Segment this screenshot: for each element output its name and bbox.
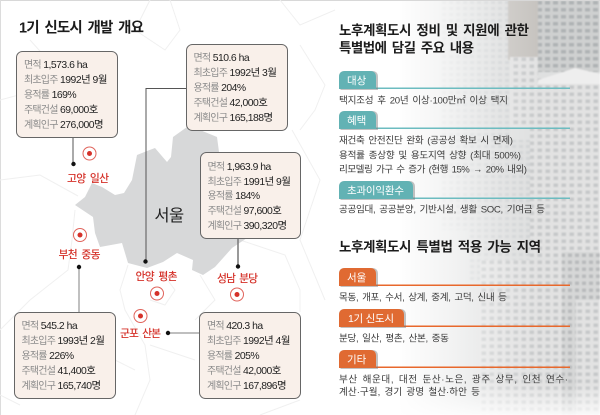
- heading: eligible areas: 노후계획도시 특별법 적용 가능 지역: [339, 240, 541, 254]
- panel: Bucheon Jungdong: 면적 545.2 ha: [22, 320, 78, 332]
- panel: Seongnam Bundang: [200, 152, 300, 238]
- panel: Goyang Ilsan: 계획인구 276,000명: [24, 119, 103, 131]
- panel: Bucheon Jungdong: 주택건설 41,400호: [22, 365, 96, 377]
- title: 1기 신도시 개발 개요: [19, 20, 144, 36]
- section: Seoul: 서울: [347, 272, 367, 284]
- panel: Goyang Ilsan: 최초입주 1992년 9월: [24, 73, 107, 86]
- marker: Anyang Pyeongchon: [150, 287, 164, 300]
- panel: Bucheon Jungdong: 최초입주 1993년 2월: [22, 334, 104, 347]
- panel: Goyang Ilsan: [16, 52, 118, 138]
- panel: Seongnam Bundang: 주택건설 97,600호: [208, 205, 282, 217]
- connector: Gunpo Sanbon: [166, 331, 200, 335]
- label: Goyang Ilsan: 고양 일산: [67, 171, 109, 185]
- marker: Seongnam Bundang: [230, 288, 244, 301]
- section: others: [339, 350, 570, 398]
- panel: Anyang Pyeongchon: 최초입주 1992년 3월: [194, 66, 276, 79]
- panel: Goyang Ilsan: 용적률 169%: [24, 89, 76, 101]
- panel: Gunpo Sanbon: 면적 420.3 ha: [207, 320, 263, 332]
- label: Seongnam Bundang: 성남 분당: [217, 272, 258, 285]
- section: target: [339, 71, 570, 106]
- panel: Gunpo Sanbon: 용적률 205%: [207, 350, 259, 362]
- section: benefits: 용적률 종상향 및 용도지역 상향 (최대 500%): [339, 150, 521, 162]
- panel: Goyang Ilsan: 주택건설 69,000호: [24, 104, 99, 116]
- panel: Seongnam Bundang: 면적 1,963.9 ha: [208, 161, 272, 173]
- section: benefits: [339, 111, 570, 176]
- connector: Seongnam Bundang: [236, 238, 240, 269]
- section: others: 기타: [347, 354, 367, 366]
- panel: Seongnam Bundang: 용적률 184%: [208, 190, 260, 202]
- panel: Gunpo Sanbon: [200, 312, 300, 398]
- panel: Anyang Pyeongchon: 계획인구 165,188명: [194, 112, 273, 124]
- section: excess profit recovery: 초과이익환수: [347, 185, 404, 197]
- label: Bucheon Jungdong: 부천 중동: [58, 247, 101, 261]
- label: Gunpo Sanbon: 군포 산본: [120, 327, 161, 340]
- section: target: 택지조성 후 20년 이상·100만㎡ 이상 택지: [339, 96, 508, 106]
- section: others: 계산·구월, 경기 광명 철산·하안 등: [339, 386, 480, 398]
- panel: Goyang Ilsan: 면적 1,573.6 ha: [24, 59, 88, 71]
- panel: Seongnam Bundang: 계획인구 390,320명: [208, 220, 287, 232]
- panel: Gunpo Sanbon: 계획인구 167,896명: [207, 380, 286, 392]
- section: target: 대상: [347, 75, 367, 87]
- map: Seoul: [75, 127, 260, 275]
- map: faint region boundaries: [0, 0, 335, 415]
- panel: Gunpo Sanbon: 주택건설 42,000호: [207, 365, 282, 377]
- marker: Gunpo Sanbon: [134, 310, 147, 322]
- panel: Anyang Pyeongchon: 주택건설 42,000호: [194, 97, 268, 109]
- connector: Anyang Pyeongchon: [143, 88, 187, 264]
- panel: Anyang Pyeongchon: [186, 44, 288, 130]
- panel: Bucheon Jungdong: [14, 312, 116, 398]
- heading: special act contents: [339, 23, 530, 56]
- section: first-generation new towns: [339, 309, 570, 344]
- section: benefits: 혜택: [347, 115, 366, 127]
- connector: Goyang Ilsan: [71, 137, 76, 166]
- section: Seoul: 목동, 개포, 수서, 상계, 중계, 고덕, 신내 등: [339, 292, 507, 304]
- heading: special act contents: 노후계획도시 정비 및 지원에 관한: [339, 23, 530, 38]
- section: first-generation new towns: 분당, 일산, 평촌, 산본, 중동: [339, 334, 449, 344]
- marker: Goyang Ilsan: [83, 147, 96, 160]
- panel: Bucheon Jungdong: 계획인구 165,740명: [22, 380, 101, 392]
- connector: Bucheon Jungdong: [77, 265, 81, 312]
- label: Anyang Pyeongchon: 안양 평촌: [136, 270, 178, 283]
- panel: Bucheon Jungdong: 용적률 226%: [22, 350, 74, 362]
- section: benefits: 리모델링 가구 수 증가 (현행 15% → 20% 내외): [339, 164, 527, 176]
- panel: Anyang Pyeongchon: 용적률 204%: [194, 82, 246, 94]
- section: excess profit recovery: 공공임대, 공공분양, 기반시설, 생활 SOC, 기여금 등: [339, 204, 545, 216]
- panel: Anyang Pyeongchon: 면적 510.6 ha: [194, 52, 250, 64]
- heading: special act contents: 특별법에 담길 주요 내용: [339, 40, 474, 56]
- map label: Seoul: 서울: [154, 206, 184, 225]
- section: Seoul: [339, 268, 570, 304]
- marker: Bucheon Jungdong: [74, 228, 86, 242]
- section: first-generation new towns: 1기 신도시: [348, 313, 394, 325]
- section: excess profit recovery: [339, 181, 570, 216]
- section: others: 부산 해운대, 대전 둔산·노은, 광주 상무, 인천 연수·: [339, 374, 568, 386]
- panel: Seongnam Bundang: 최초입주 1991년 9월: [208, 175, 290, 188]
- panel: Gunpo Sanbon: 최초입주 1992년 4월: [207, 334, 290, 347]
- section: benefits: 재건축 안전진단 완화 (공공성 확보 시 면제): [339, 134, 513, 146]
